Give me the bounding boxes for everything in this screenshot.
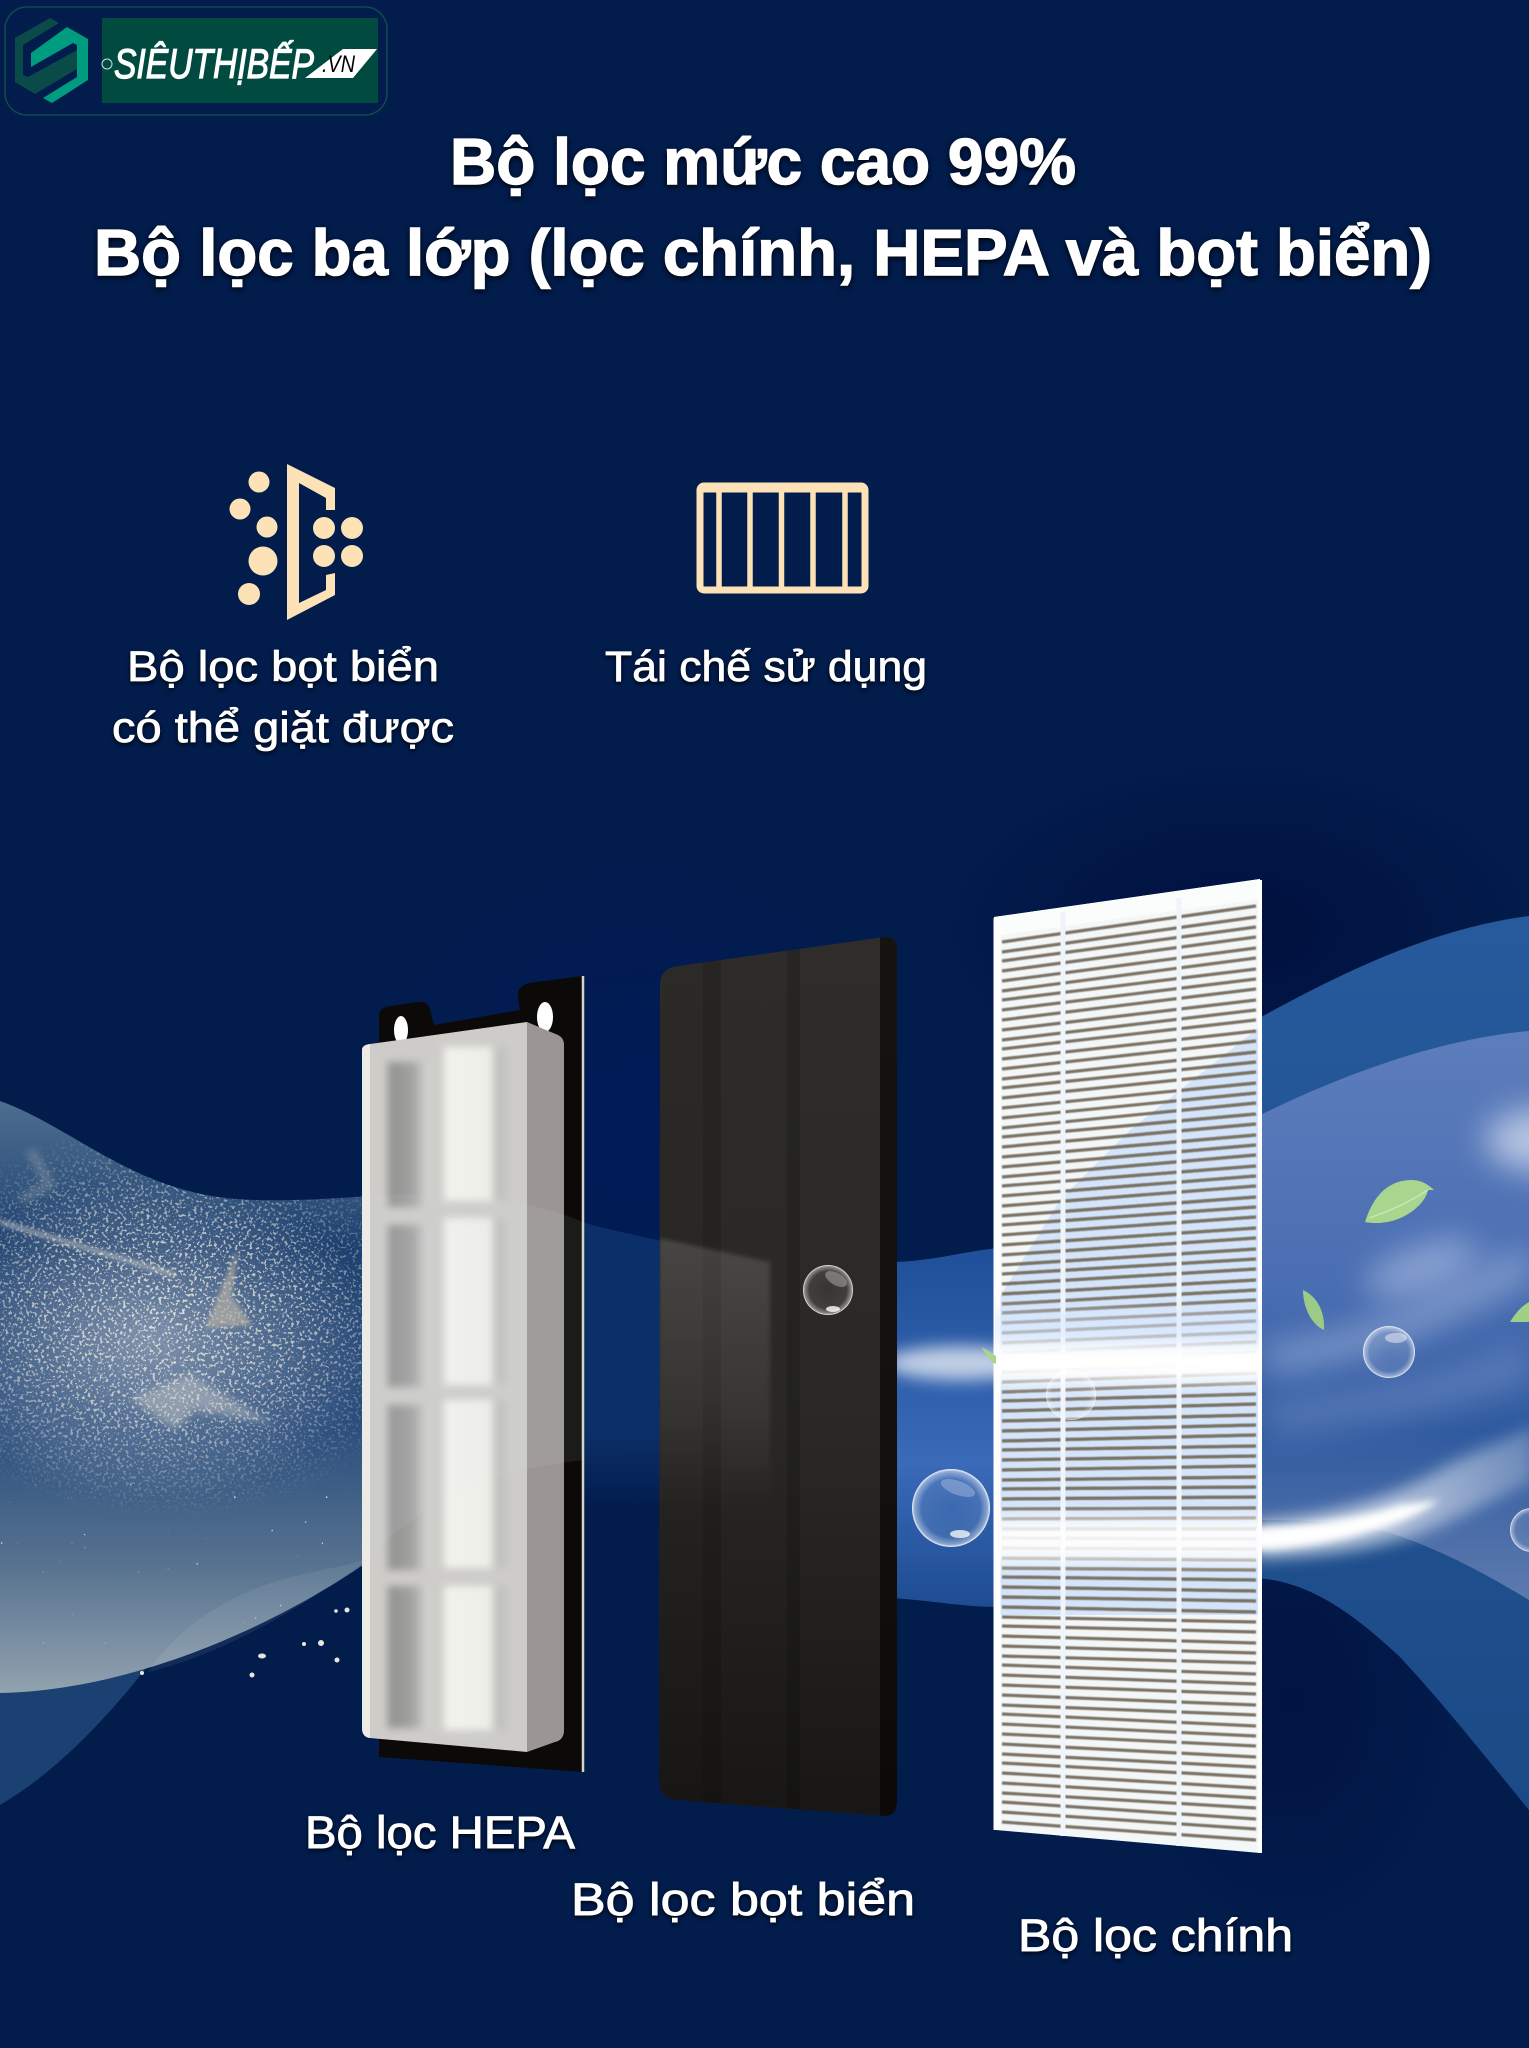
logo: SIÊUTHỊBẾP bbox=[114, 39, 314, 87]
dust particles bbox=[0, 1140, 362, 1677]
label: sponge filter: Bộ lọc bọt biển bbox=[571, 1874, 915, 1925]
icon: reusable filter frame bbox=[700, 486, 865, 590]
HEPA side wall bbox=[527, 1022, 564, 1752]
label: washable sponge filter: Bộ lọc bọt biển bbox=[127, 643, 439, 691]
bubble: large bbox=[912, 1469, 990, 1547]
filter pleats bbox=[1002, 896, 1256, 1840]
dirty air wave (left) bbox=[0, 1101, 900, 1805]
title bbox=[94, 125, 1432, 289]
title: Bộ lọc mức cao 99% bbox=[450, 125, 1076, 198]
translucent air overlay on HEPA filter bbox=[362, 1194, 583, 1565]
leaf: behind filter bbox=[982, 1347, 996, 1364]
leaf: large bbox=[1365, 1180, 1434, 1223]
label: washable sponge filter bbox=[112, 643, 454, 752]
main pleated filter bbox=[985, 879, 1275, 1853]
bubble: on sponge filter bbox=[803, 1265, 853, 1315]
logo bbox=[5, 7, 387, 115]
air band between sponge and main filter bbox=[885, 1248, 1035, 1607]
loose dust specks bbox=[140, 1608, 350, 1678]
icon: washable sponge filter bbox=[230, 464, 363, 620]
title: Bộ lọc ba lớp (lọc chính, HEPA và bọt biển) bbox=[94, 216, 1432, 289]
HEPA filter bbox=[362, 976, 583, 1772]
label: HEPA filter: Bộ lọc HEPA bbox=[305, 1807, 575, 1858]
bubble: right edge bbox=[1510, 1508, 1529, 1552]
leaf: right edge bbox=[1510, 1302, 1529, 1322]
HEPA filter windows bbox=[388, 1047, 508, 1730]
bubble: on main filter bbox=[1046, 1370, 1096, 1420]
sponge filter bbox=[659, 930, 897, 1820]
label: reusable: Tái chế sử dụng bbox=[605, 643, 927, 691]
HEPA back plate bbox=[379, 976, 583, 1772]
clean air wave (right) bbox=[1250, 916, 1529, 1810]
label: main filter: Bộ lọc chính bbox=[1018, 1910, 1293, 1961]
bubble: right bbox=[1363, 1326, 1415, 1378]
leaf: small bbox=[1303, 1290, 1324, 1330]
label: washable sponge filter: có thể giặt được bbox=[112, 704, 454, 752]
HEPA front frame bbox=[362, 1022, 527, 1752]
logo: .VN bbox=[322, 51, 356, 78]
